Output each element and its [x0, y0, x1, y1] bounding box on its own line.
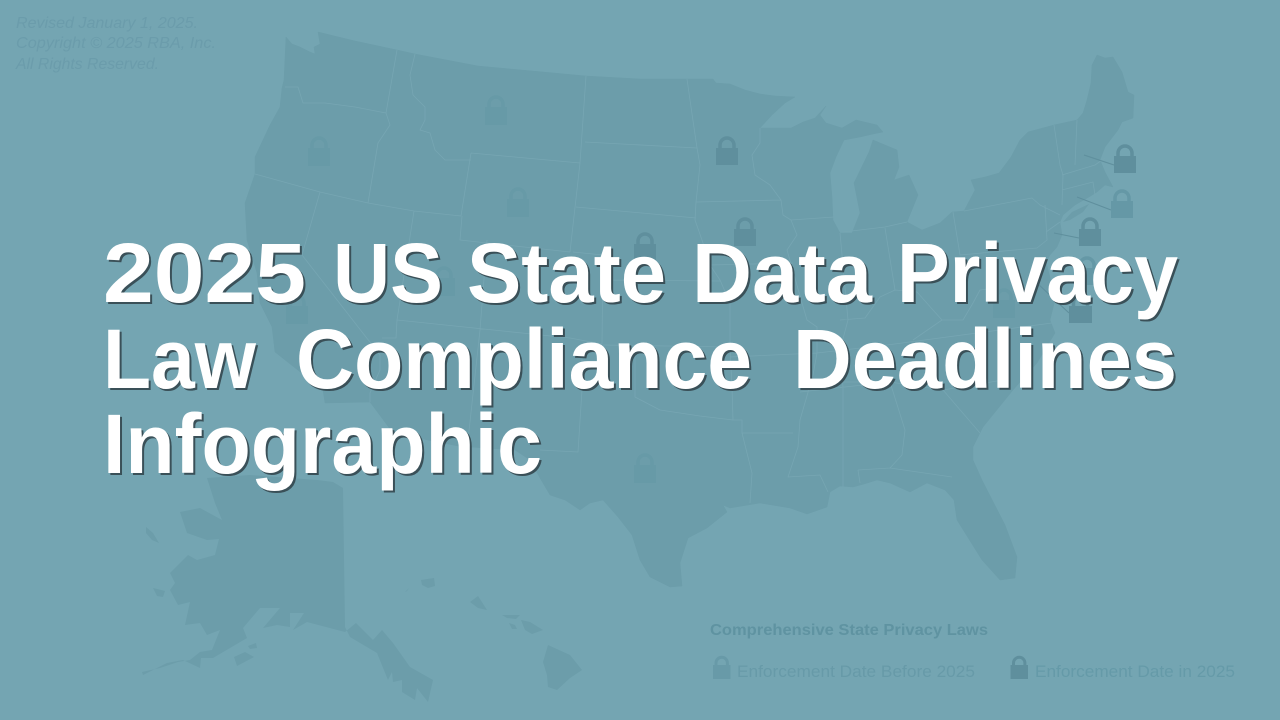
lock: California [286, 296, 308, 324]
legend [710, 622, 1235, 681]
lock: Connecticut with leader [1077, 191, 1133, 218]
lock: Texas [634, 455, 656, 483]
title: 2025 [103, 226, 306, 320]
legend heading: Comprehensive State Privacy Laws [710, 622, 988, 639]
legend label: in 2025: Enforcement Date in 2025 [1035, 662, 1235, 681]
copyright note: Revised January 1, 2025. [16, 15, 198, 32]
lock: Minnesota [716, 138, 738, 165]
copyright note: Copyright © 2025 RBA, Inc. [16, 35, 216, 52]
title: Compliance [296, 312, 752, 406]
lock: Oregon [308, 138, 330, 166]
lock: New Jersey with leader [1054, 219, 1101, 246]
copyright note [15, 15, 216, 73]
map: contiguous United States [245, 32, 1134, 587]
map: Alaska [142, 475, 433, 702]
legend label: before 2025: Enforcement Date Before 2025 [737, 662, 975, 681]
lock: Montana [485, 97, 507, 125]
map: Long Island [1063, 204, 1089, 222]
title [103, 226, 1178, 491]
title: Deadlines [793, 312, 1177, 406]
lock: Delaware faint [1076, 258, 1098, 285]
lock: Virginia [993, 290, 1015, 318]
title: Infographic [103, 397, 542, 491]
title: Law [103, 312, 257, 406]
title: Privacy [897, 226, 1178, 320]
copyright note: All Rights Reserved. [15, 56, 159, 73]
legend icon: in 2025 [1010, 657, 1028, 679]
lock: Nebraska [634, 234, 656, 262]
lock: Iowa [734, 219, 756, 246]
title: State [467, 226, 666, 320]
lock: Colorado [507, 189, 529, 217]
legend icon: before 2025 [713, 657, 730, 679]
title: Data [692, 226, 873, 320]
lock: Utah [433, 268, 455, 296]
title: US [333, 226, 443, 320]
map: Hawaii [405, 578, 582, 690]
lock: New Hampshire with leader [1084, 146, 1136, 173]
lock: Maryland with leader [1037, 283, 1092, 323]
